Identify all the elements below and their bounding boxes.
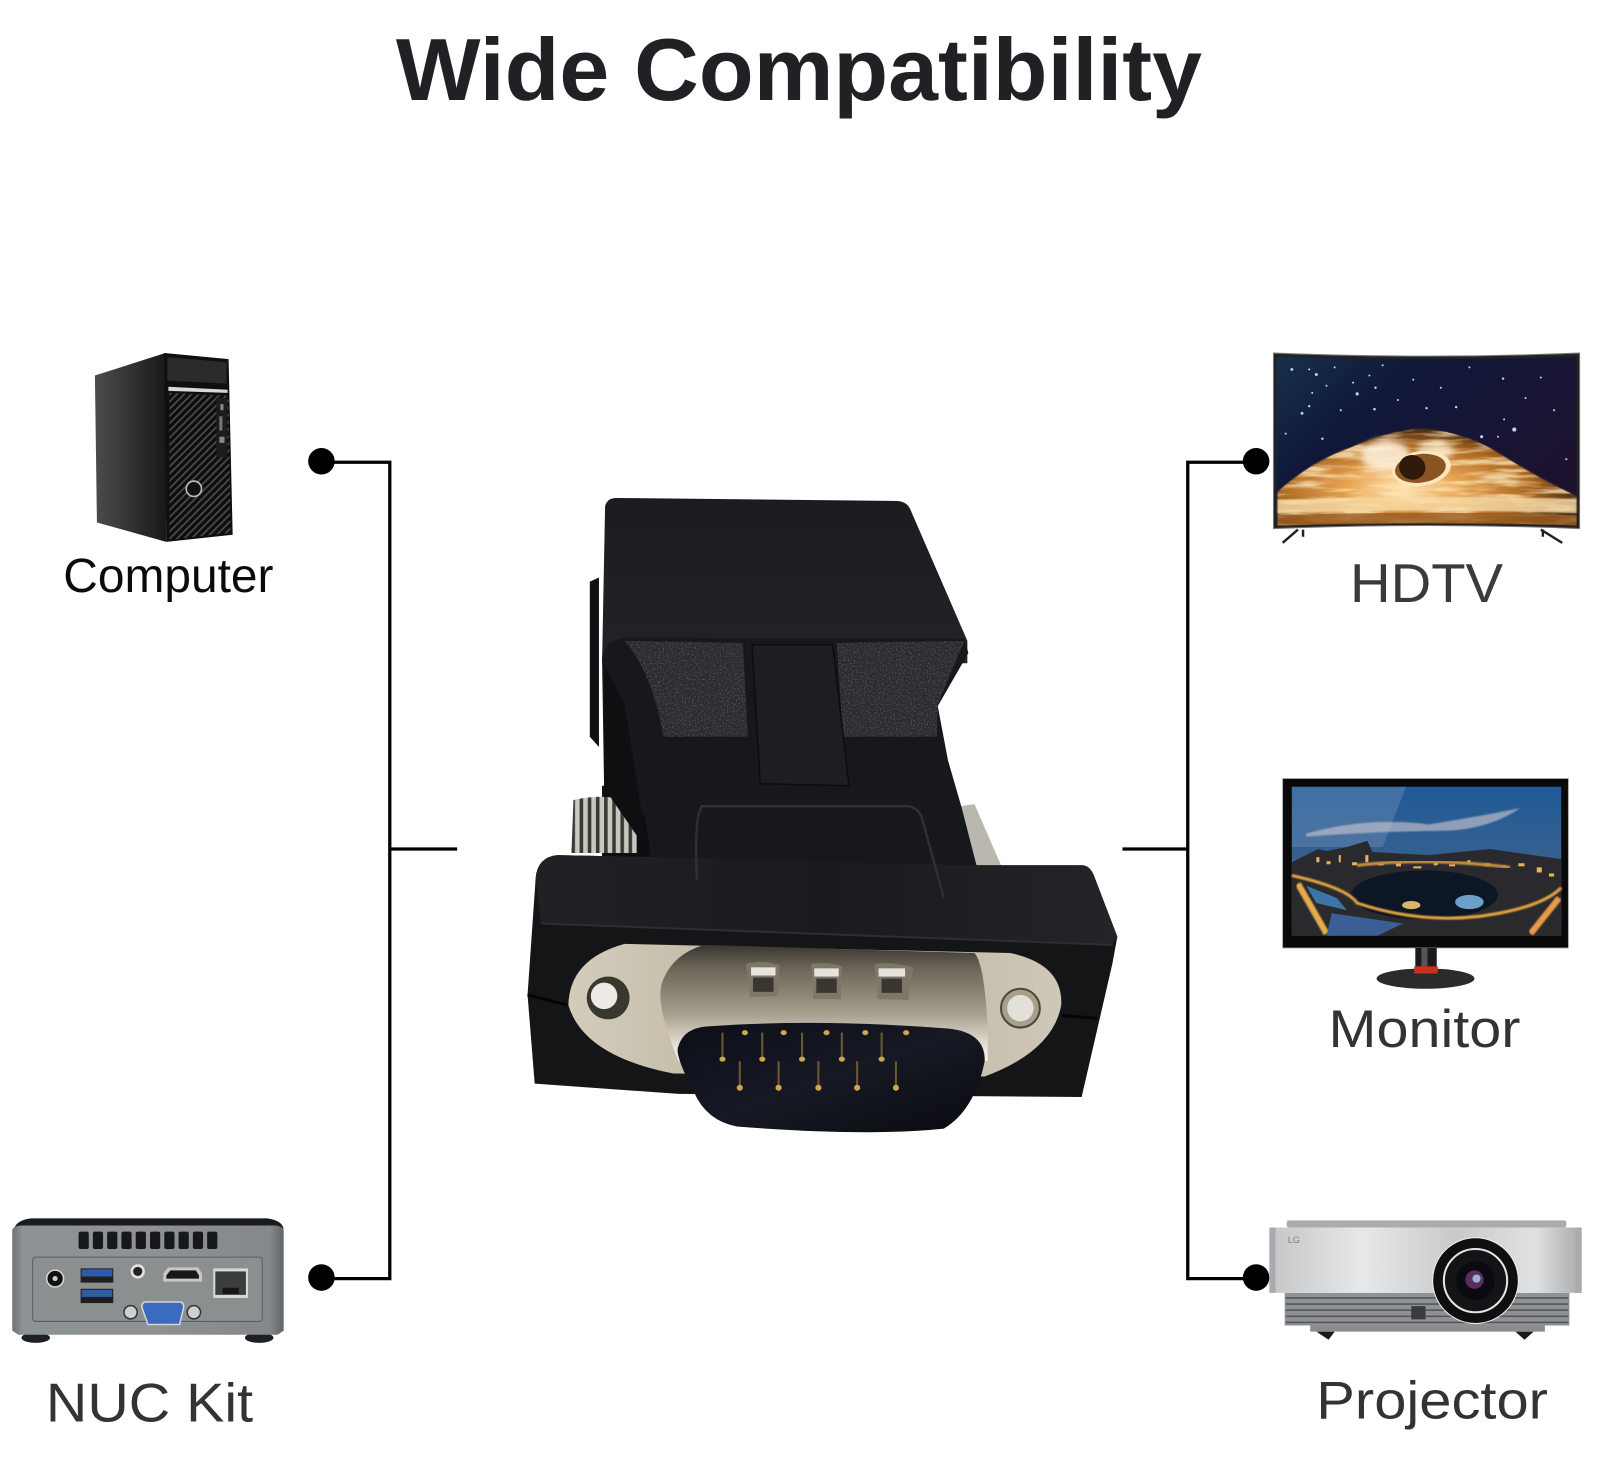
adapter connector face — [678, 1023, 985, 1132]
adapter thumb screws — [571, 786, 1001, 869]
adapter rear housing — [602, 498, 967, 663]
icon: HDTV — [1273, 353, 1580, 543]
icon: projector — [1269, 1220, 1582, 1340]
adapter recessed panel — [696, 806, 944, 898]
icon: projector: LG — [1288, 1235, 1300, 1245]
adapter rear side tab — [590, 578, 599, 747]
product: VGA adapter — [528, 498, 1117, 1132]
label: HDTV: HDTV — [1350, 552, 1503, 614]
adapter shoulder — [602, 638, 978, 869]
label: Projector: Projector — [1316, 1371, 1548, 1430]
connector: left bracket — [308, 448, 457, 1291]
adapter shell tabs — [746, 962, 913, 1000]
connector: right bracket — [1122, 448, 1269, 1291]
title: Wide Compatibility — [396, 21, 1202, 119]
adapter gold pins — [719, 1030, 909, 1091]
icon: monitor — [1283, 779, 1568, 989]
label: Computer: Computer — [63, 550, 273, 603]
label: NUC Kit: NUC Kit — [46, 1371, 253, 1433]
adapter metal shell — [660, 945, 988, 1061]
label: Monitor: Monitor — [1329, 1000, 1520, 1059]
adapter mounting holes — [587, 977, 1040, 1028]
icon: computer tower — [95, 353, 233, 542]
adapter flange — [528, 855, 1117, 1097]
adapter metal plate — [568, 944, 1061, 1077]
icon: NUC kit — [12, 1218, 284, 1343]
